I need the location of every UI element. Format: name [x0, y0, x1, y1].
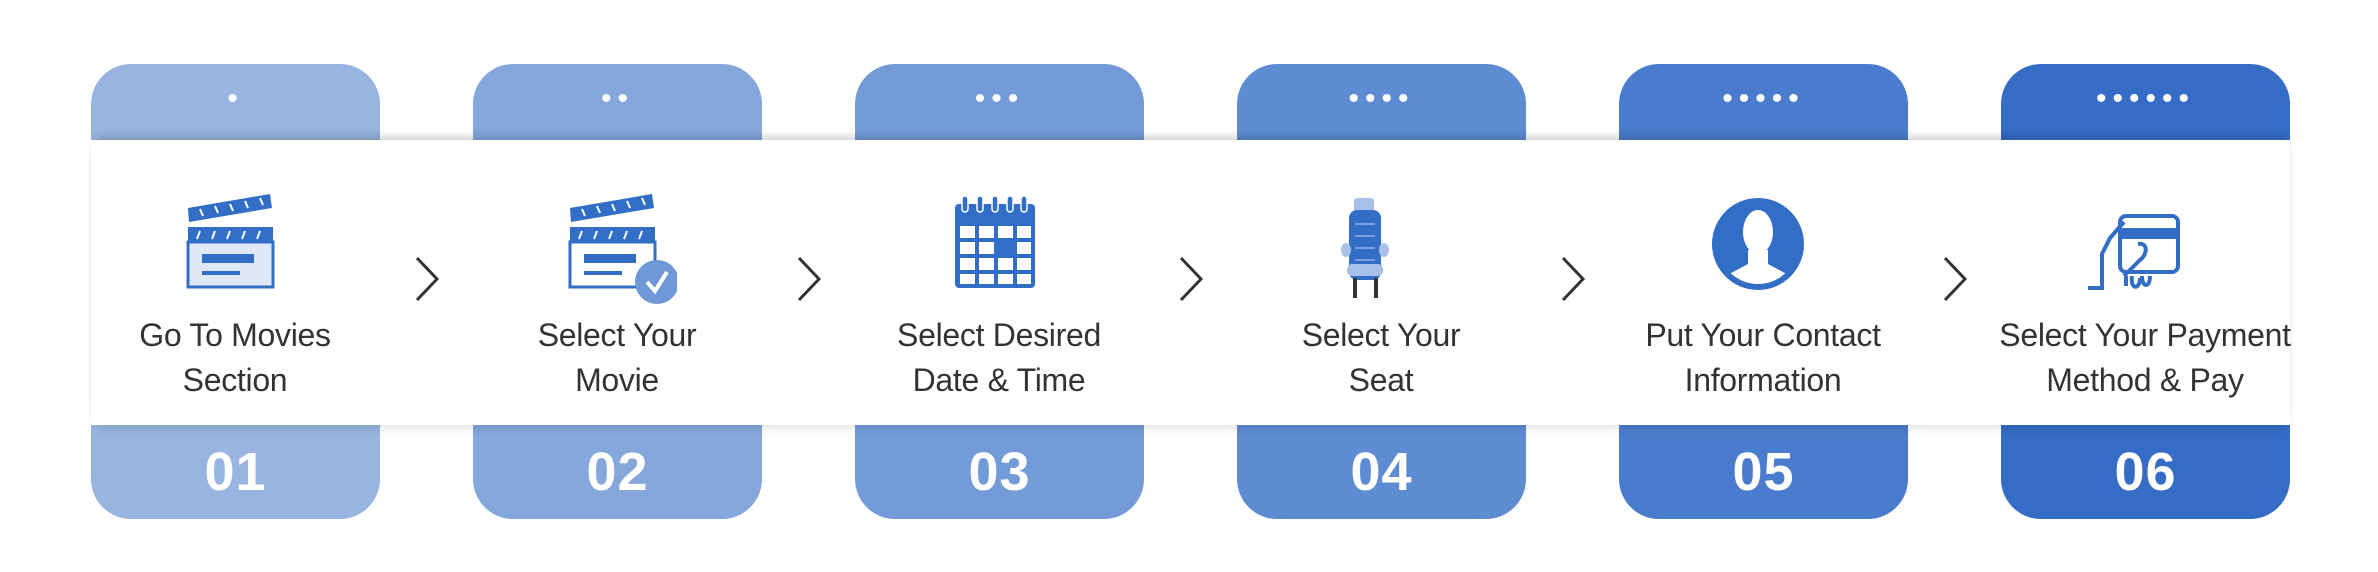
arrow 2 [798, 257, 821, 301]
label 1: Section [183, 362, 287, 398]
bottom number tabs: 05 [1732, 442, 1795, 502]
label 6 [1999, 317, 2291, 398]
bottom number tabs: 06 [2114, 442, 2177, 502]
arrow 1 [416, 257, 439, 301]
top tabs: •••• [1348, 82, 1414, 115]
label 1: Go To Movies [139, 317, 331, 353]
label 5: Put Your Contact [1645, 317, 1881, 353]
bottom number tabs: 04 [1350, 442, 1413, 502]
top tabs: ••• [975, 82, 1024, 115]
icon: hand with card [2088, 214, 2180, 290]
label 5: Information [1685, 362, 1841, 398]
top tabs: •••••• [2096, 82, 2195, 115]
icon: clapperboard [186, 194, 274, 288]
icon: user avatar [1712, 198, 1804, 290]
icon: clapperboard with check [568, 194, 677, 304]
label 2: Movie [575, 362, 659, 398]
label 4: Select Your [1302, 317, 1460, 353]
arrow 5 [1944, 257, 1967, 301]
label 1 [139, 317, 331, 398]
top tabs [91, 64, 2290, 140]
label 4: Seat [1349, 362, 1413, 398]
icon: calendar [955, 196, 1035, 288]
white band [91, 140, 2290, 425]
label 3 [897, 317, 1101, 398]
label 3: Select Desired [897, 317, 1101, 353]
label 3: Date & Time [913, 362, 1085, 398]
bottom number tabs: 02 [586, 442, 649, 502]
label 5 [1645, 317, 1881, 398]
top tabs: •• [601, 82, 634, 115]
label 2: Select Your [538, 317, 696, 353]
icon: seat [1341, 198, 1389, 298]
label 6: Method & Pay [2046, 362, 2244, 398]
label 2 [538, 317, 696, 398]
arrow 3 [1180, 257, 1203, 301]
top tabs: ••••• [1722, 82, 1805, 115]
top tabs: • [227, 82, 244, 115]
label 4 [1302, 317, 1460, 398]
label 6: Select Your Payment [1999, 317, 2291, 353]
bottom number tabs: 01 [204, 442, 267, 502]
bottom number tabs: 03 [968, 442, 1031, 502]
arrow 4 [1562, 257, 1585, 301]
bottom number tabs [91, 425, 2290, 519]
